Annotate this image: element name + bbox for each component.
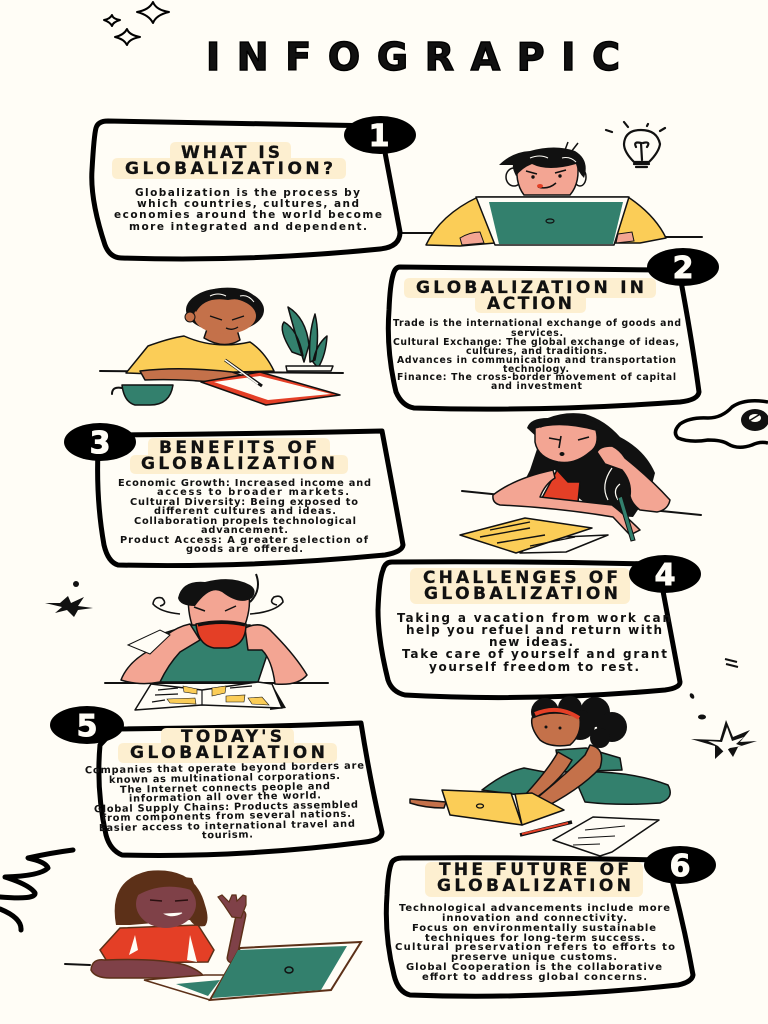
body text: Technological advancements include more xyxy=(399,903,670,914)
body text: technology. xyxy=(503,364,569,375)
illustration: boy with laptop xyxy=(400,142,702,246)
decoration: black stars and dots xyxy=(45,581,757,759)
body text: known as multinational corporations. xyxy=(109,771,340,786)
heading: THE FUTURE OF xyxy=(439,860,629,880)
number badge 4: 4 xyxy=(655,558,675,593)
heading: GLOBALIZATION? xyxy=(125,159,333,179)
illustration: girl waving with laptop xyxy=(65,870,361,1000)
heading: BENEFITS OF xyxy=(159,438,317,458)
number badge 2 xyxy=(647,248,719,286)
heading xyxy=(130,727,325,763)
body text: Finance: The cross-border movement of capital xyxy=(397,372,676,383)
heading highlight xyxy=(130,438,348,474)
body text: The Internet connects people and xyxy=(120,781,330,796)
body text: new ideas. xyxy=(489,635,573,649)
body text: Product Access: A greater selection of xyxy=(120,535,369,546)
heading: GLOBALIZATION xyxy=(141,454,335,474)
body text: Cultural Diversity: Being exposed to xyxy=(130,497,358,508)
body text: preserve unique customs. xyxy=(451,952,617,963)
number badge 2: 2 xyxy=(673,251,693,286)
body text: yourself freedom to rest. xyxy=(429,660,639,674)
body text: economies around the world become xyxy=(114,209,382,221)
heading highlight xyxy=(425,862,643,897)
decoration: cloud outline with swirl xyxy=(675,401,768,447)
panel 2: globalization in action xyxy=(388,248,719,409)
heading xyxy=(416,278,644,314)
body text: and investment xyxy=(491,381,583,392)
heading highlight xyxy=(118,728,337,763)
body text: access to broader markets. xyxy=(157,487,349,498)
body text: different cultures and ideas. xyxy=(154,506,336,517)
heading: CHALLENGES OF xyxy=(423,568,618,588)
heading xyxy=(437,860,631,896)
body text: cultures, and traditions. xyxy=(466,346,607,357)
body text: effort to address global concerns. xyxy=(422,972,647,983)
body text: Companies that operate beyond borders are xyxy=(85,761,364,776)
body text xyxy=(395,903,675,983)
body text: from components from several nations. xyxy=(102,809,351,824)
panel 5: today's globalization xyxy=(50,706,382,855)
panel 4: challenges of globalization xyxy=(378,555,701,698)
body text: Cultural preservation refers to efforts to xyxy=(395,942,675,953)
body text: techniques for long-term success. xyxy=(425,933,645,944)
decoration: black squiggle xyxy=(0,850,73,930)
body text: goods are offered. xyxy=(186,544,303,555)
number badge 4 xyxy=(629,555,701,593)
body text: innovation and connectivity. xyxy=(442,913,627,924)
body text: Taking a vacation from work can xyxy=(397,611,671,625)
panel 6: the future of globalization xyxy=(386,846,716,996)
heading: TODAY'S xyxy=(181,727,282,747)
heading highlight xyxy=(410,568,630,604)
heading xyxy=(141,438,335,474)
number badge 6: 6 xyxy=(670,849,690,884)
heading highlight xyxy=(404,278,656,313)
panel 1: what is globalization xyxy=(92,116,416,259)
number badge 1: 1 xyxy=(369,119,389,154)
body text: services. xyxy=(511,328,563,339)
heading: GLOBALIZATION xyxy=(437,876,631,896)
illustration: woman on floor with laptop xyxy=(410,696,670,856)
number badge 5 xyxy=(50,706,124,744)
body text: which countries, cultures, and xyxy=(137,198,359,210)
body text xyxy=(114,187,382,233)
body text: Focus on environmentally sustainable xyxy=(412,923,656,934)
illustration: girl with tablet xyxy=(100,288,343,405)
title: INFOGRAPIC xyxy=(206,35,620,79)
body text: tourism. xyxy=(202,829,253,841)
body text: Global Supply Chains: Products assembled xyxy=(94,800,358,815)
number badge 1 xyxy=(344,116,416,154)
heading: GLOBALIZATION xyxy=(424,584,618,604)
heading xyxy=(423,568,618,604)
body text: Economic Growth: Increased income and xyxy=(118,478,371,489)
heading: WHAT IS xyxy=(181,143,280,163)
body text: information all over the world. xyxy=(129,790,321,805)
heading: ACTION xyxy=(487,294,572,314)
illustration: man drinking coffee xyxy=(105,574,328,710)
number badge 6 xyxy=(644,846,716,884)
body text: Trade is the international exchange of goods and xyxy=(393,318,681,329)
decoration: sparkles top left xyxy=(104,2,169,45)
number badge 3 xyxy=(64,423,136,461)
body text xyxy=(85,761,364,841)
illustration: thinking woman with papers xyxy=(460,413,701,553)
body text: Advances in communication and transportation xyxy=(397,355,676,366)
body text: Easier access to international travel and xyxy=(99,819,355,834)
body text: more integrated and dependent. xyxy=(129,221,367,233)
body text xyxy=(393,318,681,392)
body text xyxy=(397,611,671,674)
heading: GLOBALIZATION IN xyxy=(416,278,644,298)
body text: advancement. xyxy=(201,525,288,536)
panel 3: benefits of globalization xyxy=(64,423,403,566)
body text: Take care of yourself and grant xyxy=(402,647,667,661)
heading highlight xyxy=(112,142,346,179)
body text: help you refuel and return with xyxy=(406,623,662,637)
heading: GLOBALIZATION xyxy=(130,743,325,763)
body text: Collaboration propels technological xyxy=(134,516,356,527)
icon: light bulb xyxy=(606,122,665,167)
body text xyxy=(118,478,371,555)
body text: Globalization is the process by xyxy=(135,187,360,199)
number badge 3: 3 xyxy=(90,426,110,461)
number badge 5: 5 xyxy=(77,709,97,744)
body text: Global Cooperation is the collaborative xyxy=(406,962,662,973)
heading xyxy=(125,143,333,179)
body text: Cultural Exchange: The global exchange of ideas, xyxy=(393,337,679,348)
